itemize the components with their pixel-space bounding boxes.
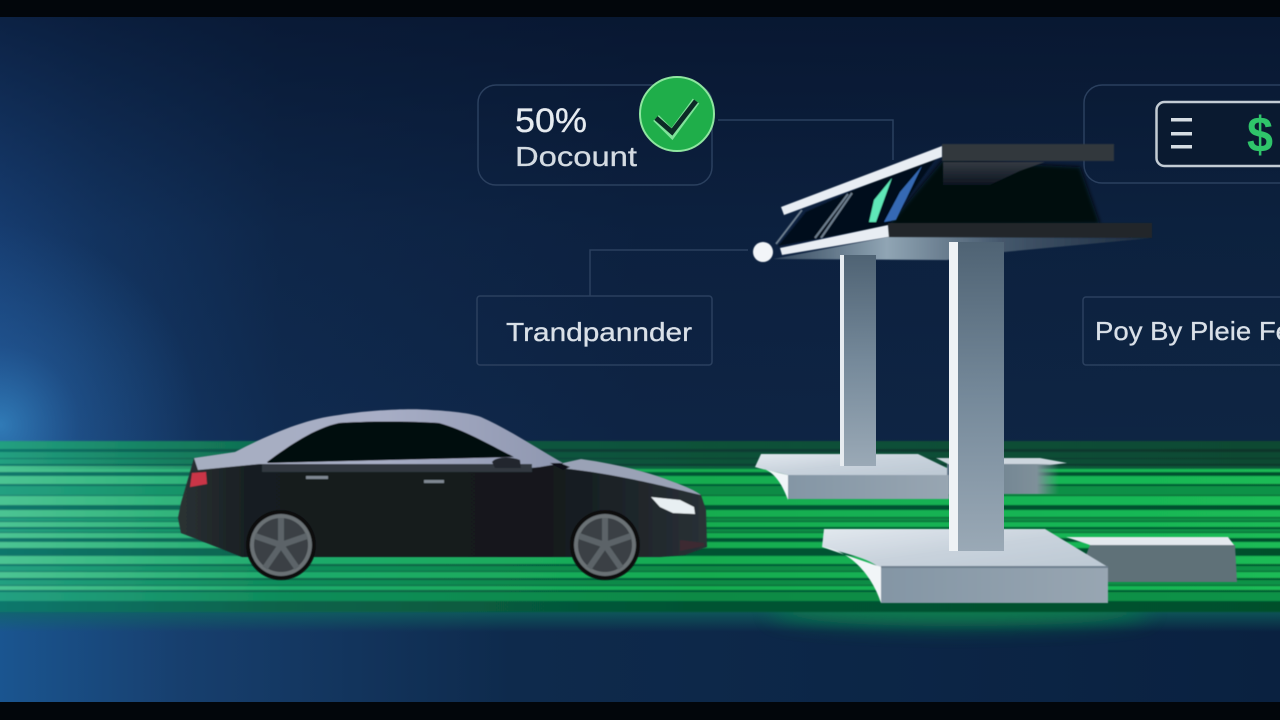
panel: pay by plate	[1083, 297, 1280, 365]
booth windows	[776, 150, 942, 246]
icon: menu lines	[1171, 118, 1192, 148]
text: pay by plate label: Poy By Pleie Fe	[1095, 316, 1280, 346]
car mirror	[492, 458, 521, 468]
icon: green check badge	[640, 77, 714, 151]
car front wheel	[570, 510, 640, 580]
car rear wheel	[246, 510, 316, 580]
toll booth	[753, 144, 1152, 262]
back pillar	[840, 255, 876, 466]
text: Docount: Docount	[515, 141, 637, 172]
front pillar	[949, 242, 1004, 551]
booth lower white bar	[780, 225, 889, 255]
speed road stripes	[0, 441, 1280, 612]
booth sensor light	[753, 242, 773, 262]
panel: 50% discount	[478, 85, 712, 185]
car tail light	[190, 472, 207, 487]
panel: payment device	[1084, 85, 1280, 183]
car windshield base	[550, 463, 570, 470]
connector: transponder to booth	[590, 250, 748, 296]
back base of toll booth	[755, 454, 1067, 500]
car roof and deck highlight	[194, 409, 563, 470]
booth top slab	[942, 144, 1114, 161]
car belt line	[262, 464, 532, 472]
car	[178, 409, 707, 580]
car front grille	[680, 540, 704, 551]
car headlight	[651, 497, 695, 514]
connector: discount to booth	[718, 120, 893, 160]
green floor glow under toll booth	[770, 598, 1150, 626]
car hood highlight	[560, 459, 701, 495]
front base of toll booth	[822, 529, 1108, 603]
booth underside	[773, 237, 1152, 260]
icon: dollar sign: $	[1247, 107, 1273, 163]
booth lower slab	[888, 223, 1152, 238]
right base of toll booth	[1066, 537, 1237, 582]
text: 50%: 50%	[515, 102, 587, 140]
panel: transponder	[477, 296, 712, 365]
text: transponder label: Trandpannder	[506, 317, 692, 347]
car window	[267, 422, 514, 463]
car body	[178, 409, 707, 557]
booth upper shelf	[943, 162, 1045, 185]
booth upper white bar	[781, 146, 942, 215]
device screen	[1156, 102, 1280, 166]
car door handles	[306, 476, 328, 479]
booth canopy dark body	[888, 160, 1100, 226]
